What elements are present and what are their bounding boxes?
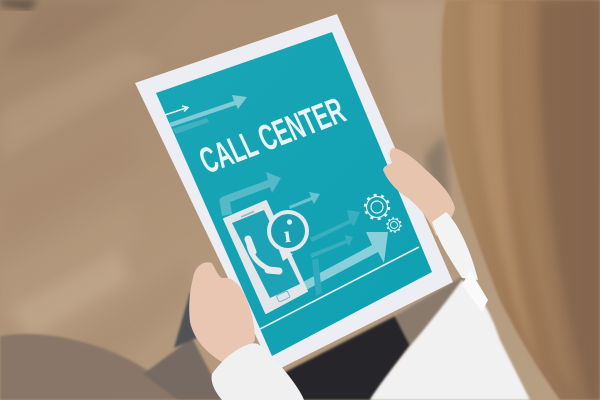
arrow: large lower	[303, 232, 388, 290]
icon: info bubble: ı	[282, 222, 293, 247]
poster paper	[135, 14, 453, 372]
arrow: top wide translucent	[169, 95, 247, 127]
arrow: top thin white	[165, 106, 188, 115]
arrow: small right of phone	[289, 192, 320, 209]
arrow: vertical faint elbow	[312, 258, 322, 296]
seated lap and dark trousers	[0, 135, 470, 400]
arrow: middle elbow	[220, 172, 281, 216]
title: CALL CENTER	[194, 91, 352, 182]
arrow: faint right	[310, 210, 360, 242]
arrow: top faint band	[172, 118, 209, 134]
icon: smartphone	[224, 201, 307, 313]
icon: info bubble	[267, 210, 309, 261]
blonde hair	[441, 0, 600, 400]
left hand	[189, 262, 255, 364]
baseline rule	[260, 247, 419, 329]
right hand	[383, 148, 455, 236]
icon: small gear	[387, 218, 401, 232]
icon: large gear	[365, 195, 389, 219]
arrow: faint lower	[310, 235, 353, 258]
icon: telephone handset	[248, 239, 279, 271]
teal poster panel	[156, 32, 432, 356]
white shirt sleeves and back	[212, 212, 530, 400]
